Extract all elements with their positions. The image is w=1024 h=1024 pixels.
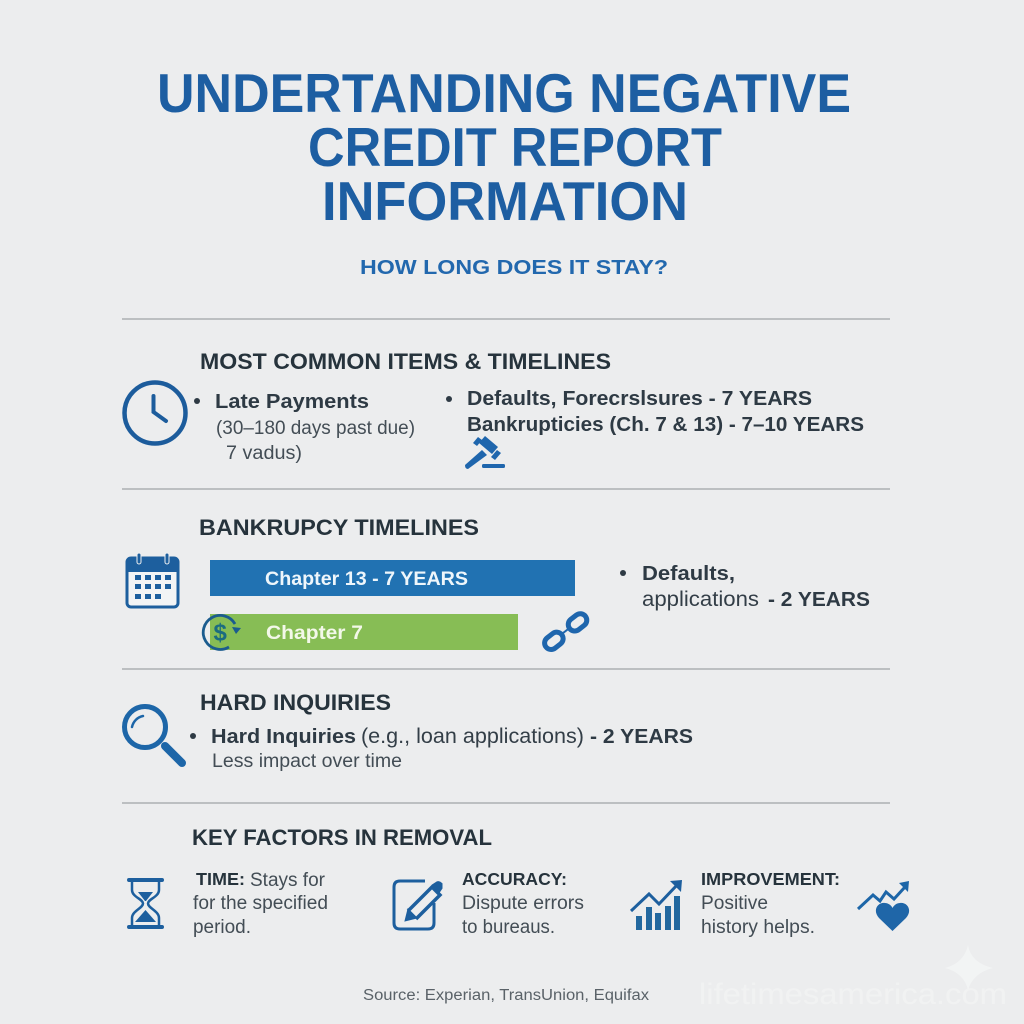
icon: clock [124,382,186,444]
text block: late payments [194,390,415,464]
icon: dollar cycle [203,615,241,649]
heading: bankruptcy timelines: BANKRUPCY TIMELINES [199,515,479,540]
icon: broken chain link [542,611,589,652]
title: CREDIT REPORT [308,117,722,178]
text block: defaults and bankruptcies [446,387,864,436]
text block: hard inquiries detail: Less impact over time [212,751,402,772]
icon: gavel [465,436,505,469]
heading: key factors: KEY FACTORS IN REMOVAL [192,825,492,850]
text block: late payments: 7 vadus) [226,443,302,464]
text block: hard inquiries detail: Hard Inquiries [211,725,356,748]
title: INFORMATION [322,171,688,232]
text block: defaults, applications: applications [642,588,759,611]
watermark: lifetimesamerica.com [699,978,1007,1011]
heading: hard inquiries: HARD INQUIRIES [200,690,391,715]
watermark [699,945,1007,1011]
text block: accuracy: Dispute errors [462,893,584,914]
text block: improvement: Positive [701,893,768,914]
source note: Source: Experian, TransUnion, Equifax [363,987,649,1004]
text block: hard inquiries detail [190,725,693,772]
bar: chapter 13: Chapter 13 - 7 YEARS [265,568,468,590]
icon: trend line with heart [858,881,909,931]
icon: magnifying glass [124,706,182,763]
text block: defaults and bankruptcies: Defaults, Forecrslsures - 7 YEARS [467,387,812,410]
text block: late payments: (30–180 days past due) [216,418,415,439]
subtitle: HOW LONG DOES IT STAY? [360,256,668,279]
text block: improvement [701,869,840,938]
panel: bankruptcy timelines [127,515,870,652]
text block: time: period. [193,917,251,938]
panel: key factors in removal [127,825,909,938]
text block: time: for the specified [193,893,328,914]
title: UNDERTANDING NEGATIVE [157,63,851,124]
text block: defaults, applications: Defaults, [642,562,735,585]
text block: defaults and bankruptcies: Bankrupticies (Ch. 7 & 13) - 7–10 YEARS [467,413,864,436]
icon: hourglass [127,878,164,929]
icon: growth chart [631,880,682,930]
text block: time: TIME: [196,869,245,889]
text block: hard inquiries detail: - 2 YEARS [590,725,693,748]
panel: hard inquiries [124,690,693,772]
text block: late payments: Late Payments [215,390,369,413]
icon: calendar [127,553,178,607]
text block: time: Stays for [250,870,326,891]
bar: chapter 7 [210,614,518,650]
text block: defaults, applications [620,562,870,611]
text block: hard inquiries detail: (e.g., loan applications) [361,725,584,748]
bar: chapter 7: Chapter 7 [266,622,363,644]
text block: accuracy: to bureaus. [462,917,555,938]
text block: accuracy [462,869,584,938]
text block: improvement: IMPROVEMENT: [701,869,840,889]
bar: chapter 13 [210,560,575,596]
text block: time [193,869,328,938]
text block: accuracy: ACCURACY: [462,869,567,889]
icon: edit pencil [394,881,441,929]
text block: defaults, applications: - 2 YEARS [768,588,870,611]
panel: most common items and timelines [124,349,864,469]
text block: improvement: history helps. [701,917,815,938]
icon: dollar cycle: $ [214,620,228,646]
title [157,63,851,232]
heading: most common items: MOST COMMON ITEMS & TIMELINES [200,349,611,374]
